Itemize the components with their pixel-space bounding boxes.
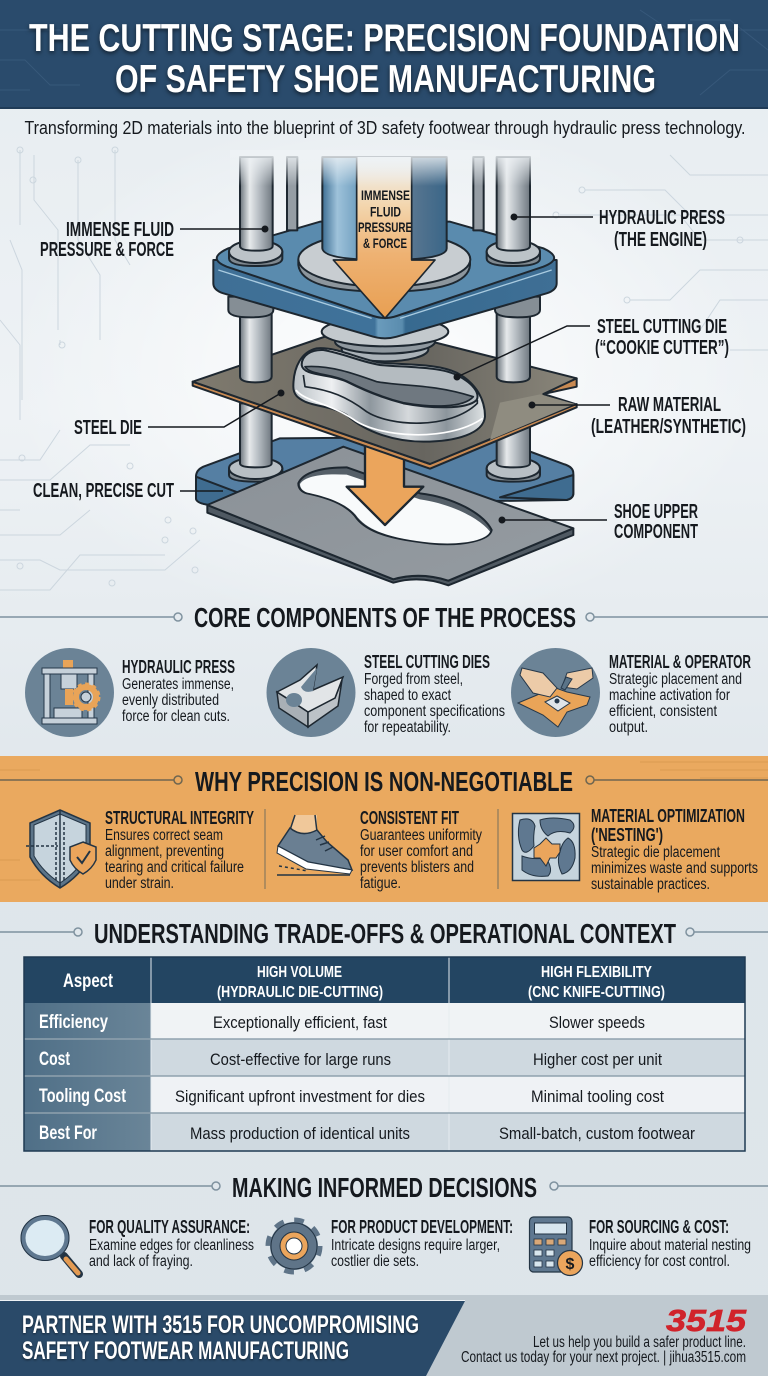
text: material optimization [591,806,758,893]
raw material sheet [193,324,577,469]
callout: immense fluid pressure [40,219,268,261]
arrow label [358,187,412,251]
table cells: high volume: Mass production of identical units [190,1124,410,1143]
hydraulic press diagram [193,157,577,585]
table cells: high flexibility: Minimal tooling cost [531,1087,664,1106]
text: structural integrity: under strain. [105,875,174,892]
text: steel cutting dies: component specifications [364,703,505,720]
main orange force arrow [333,157,435,318]
text: sourcing and cost [589,1217,751,1270]
text: consistent fit: CONSISTENT FIT [360,808,459,828]
text: consistent fit: fatigue. [360,875,401,892]
text: quality assurance: FOR QUALITY ASSURANCE: [89,1217,250,1237]
callout: steel die [74,390,284,439]
text: quality assurance: Examine edges for cleanliness [89,1237,254,1254]
text: steel cutting dies [364,652,505,736]
text: hydraulic press: force for clean cuts. [122,708,230,725]
callout: immense fluid pressure: PRESSURE & FORCE [40,239,174,261]
icon: nesting [512,814,580,880]
table header: (CNC KNIFE-CUTTING) [528,984,665,1001]
text: hydraulic press: Generates immense, [122,676,234,693]
text: material and operator: machine activation for [609,687,730,704]
upper rods on sheet [228,297,540,382]
panel: why precision [0,756,768,902]
table header: HIGH VOLUME [257,964,342,981]
footer call to action [22,1311,419,1365]
text: quality assurance [89,1217,254,1270]
logo: 3515: 3515 [666,1303,747,1338]
table row labels: Tooling Cost [39,1086,127,1107]
icon: steel cutting die [266,648,356,737]
callout: shoe upper component [498,501,698,543]
text: product development: FOR PRODUCT DEVELOPMENT: [331,1217,513,1237]
circuit background traces [0,147,768,590]
icon: shield [26,810,96,888]
text: quality assurance: and lack of fraying. [89,1253,193,1270]
heading: why precision [0,766,768,797]
text: sourcing and cost: efficiency for cost control. [589,1253,730,1270]
table header: HIGH FLEXIBILITY [541,964,652,981]
arrow label: FLUID [370,204,401,220]
text: structural integrity [105,808,254,892]
text: consistent fit [360,808,482,892]
text: steel cutting dies: Forged from steel, [364,671,463,688]
panel: core components [25,648,751,737]
icon: safety shoe [277,815,352,875]
text: steel cutting dies: for repeatability. [364,719,451,736]
text: structural integrity: Ensures correct seam [105,827,223,844]
table cells: high flexibility: Higher cost per unit [533,1050,662,1069]
heading: informed decisions [0,1172,768,1203]
icon: hydraulic press [25,648,114,737]
main cylinder [298,157,470,292]
top fade over press columns [230,150,540,186]
table cells: high volume: Significant upfront investment for dies [175,1087,425,1106]
text: hydraulic press: HYDRAULIC PRESS [122,657,235,677]
arrow label: IMMENSE [361,187,410,203]
table row labels [39,1012,127,1144]
text: hydraulic press: evenly distributed [122,692,219,709]
icon: calculator [530,1217,582,1276]
text: product development: Intricate designs require larger, [331,1237,500,1254]
callout: steel cutting die [454,316,729,380]
table header [63,964,665,1001]
callout: shoe upper component: SHOE UPPER [614,501,698,523]
shoe upper component sheet with hole [207,447,573,585]
table cells: high volume [175,1013,425,1143]
table header: Aspect [63,971,114,992]
table cells: high flexibility [499,1013,695,1143]
text: steel cutting dies: shaped to exact [364,687,452,704]
callout: hydraulic press: (THE ENGINE) [614,229,707,251]
callout: steel die: STEEL DIE [74,417,142,439]
icon: gear [270,1222,318,1270]
footer call to action: PARTNER WITH 3515 FOR UNCOMPROMISING [22,1311,419,1339]
callout: raw material [528,394,746,438]
header band [0,0,768,109]
lower rods and collars [229,403,540,482]
upper press plate [213,222,557,338]
table row labels: Cost [39,1049,70,1070]
piston under plate [322,317,448,361]
footer contact text [461,1334,746,1366]
callout: raw material: RAW MATERIAL [618,394,721,416]
callout: immense fluid pressure: IMMENSE FLUID [66,219,174,241]
text: material optimization: ('NESTING') [591,825,663,845]
upper rods [229,157,540,266]
steel cutting die [293,348,485,442]
table cells: high volume: Exceptionally efficient, fast [213,1013,387,1032]
lower press base [196,437,573,505]
text: structural integrity: tearing and critical failure [105,859,244,876]
text: material and operator: output. [609,719,648,736]
title [29,17,740,101]
footer call to action: SAFETY FOOTWEAR MANUFACTURING [22,1337,349,1365]
table header: (HYDRAULIC DIE-CUTTING) [217,984,383,1001]
arrow label: PRESSURE [358,219,412,235]
text: product development [331,1217,513,1270]
icon: material and operator [511,648,600,737]
callout: shoe upper component: COMPONENT [614,521,698,543]
text: structural integrity: STRUCTURAL INTEGRITY [105,808,254,828]
heading: informed decisions: MAKING INFORMED DECISIONS [232,1172,537,1203]
icon: magnifying glass [21,1216,79,1274]
table row labels: Efficiency [39,1012,108,1033]
callout: clean precise cut: CLEAN, PRECISE CUT [33,480,174,502]
text: material optimization: Strategic die placement [591,844,721,861]
table cells: high volume: Cost-effective for large runs [210,1050,391,1069]
lower orange force arrow [347,443,423,525]
text: material and operator: efficient, consistent [609,703,718,720]
text: consistent fit: for user comfort and [360,843,473,860]
icon: calculator: $ [566,1256,574,1273]
text: product development: costlier die sets. [331,1253,419,1270]
table cells: high flexibility: Small-batch, custom footwear [499,1124,695,1143]
text: hydraulic press [122,657,235,725]
table cells: high flexibility: Slower speeds [549,1013,645,1032]
comparison table [24,957,745,1151]
table row labels: Best For [39,1123,97,1144]
text: consistent fit: Guarantees uniformity [360,827,482,844]
heading: core components: CORE COMPONENTS OF THE PROCESS [194,602,576,633]
text: structural integrity: alignment, preventing [105,843,224,860]
arrow label: & FORCE [363,235,407,251]
text: consistent fit: prevents blisters and [360,859,474,876]
heading: why precision: WHY PRECISION IS NON-NEGOTIABLE [195,766,573,797]
footer [0,1295,768,1376]
text: material and operator [609,652,751,736]
text: material optimization: sustainable practices. [591,876,710,893]
callout: hydraulic press [510,207,725,251]
text: steel cutting dies: STEEL CUTTING DIES [364,652,490,672]
